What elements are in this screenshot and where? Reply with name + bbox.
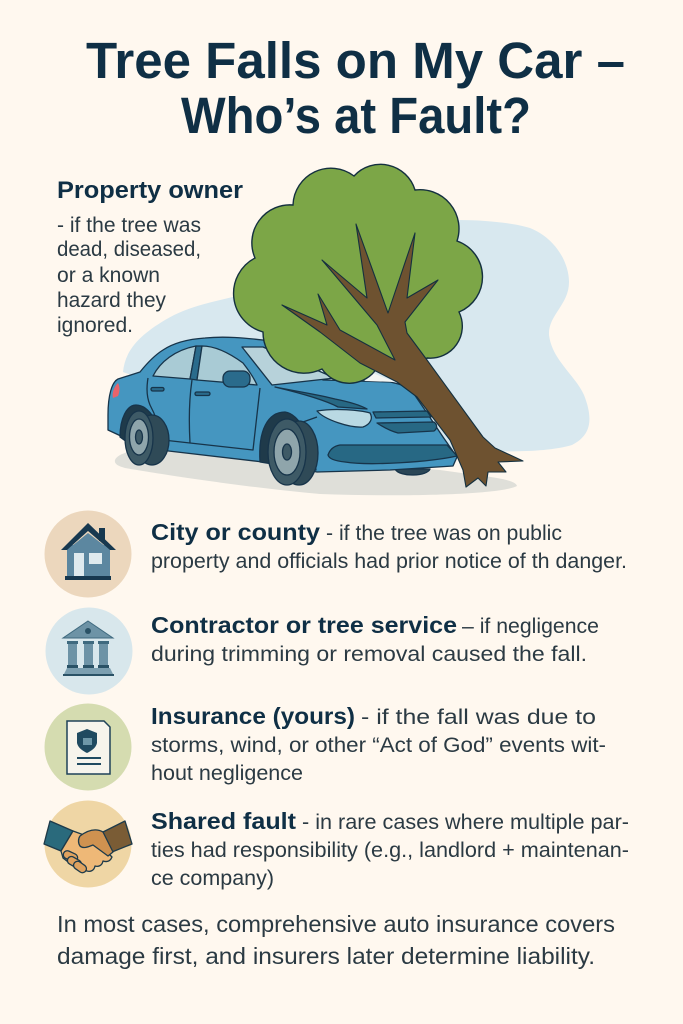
text block: insurance: - if the fall was due to — [361, 705, 596, 729]
lower intake — [328, 445, 457, 464]
illustration: tree fallen on car — [108, 164, 589, 495]
doors — [147, 378, 260, 450]
far tire — [395, 469, 430, 475]
footer note: damage first, and insurers later determine liability. — [57, 943, 595, 969]
text block: insurance: Insurance (yours) — [151, 703, 355, 729]
headlight — [317, 410, 371, 427]
text block: shared fault — [151, 808, 629, 890]
rear window — [153, 346, 196, 379]
text block: city or county: property and officials had prior notice of th danger. — [151, 549, 627, 573]
grille — [373, 411, 437, 433]
text block: contractor or tree service: Contractor or tree service — [151, 612, 457, 638]
text block: property owner: dead, diseased, — [57, 237, 201, 261]
text block: property owner: Property owner — [57, 177, 243, 204]
tree trunk and branches — [282, 224, 523, 487]
windshield — [242, 347, 335, 385]
text block: contractor or tree service: during trimming or removal caused the fall. — [151, 642, 587, 666]
window pillar — [190, 346, 202, 380]
text block: contractor or tree service: – if negligence — [462, 614, 599, 638]
text block: property owner: or a known — [57, 263, 160, 287]
text block: property owner: ignored. — [57, 313, 133, 337]
text block: contractor or tree service — [151, 612, 599, 666]
text block: city or county: City or county — [151, 519, 320, 545]
text block: insurance: storms, wind, or other “Act of God” events wit- — [151, 733, 606, 757]
text block: shared fault: - in rare cases where multiple par- — [302, 810, 629, 834]
door handles — [151, 388, 164, 391]
ground shadow — [115, 449, 517, 495]
mirror — [223, 371, 250, 387]
text block: city or county: - if the tree was on public — [326, 521, 562, 545]
text block: property owner — [57, 177, 243, 337]
title: Who’s at Fault? — [181, 87, 531, 144]
text block: property owner: - if the tree was — [57, 213, 201, 237]
hood crease — [275, 387, 367, 409]
text block: insurance — [151, 703, 606, 785]
background blob — [123, 220, 589, 451]
text block: shared fault: ce company) — [151, 866, 274, 890]
icon: insurance document — [44, 704, 132, 790]
title: Tree Falls on My Car – — [86, 32, 625, 89]
front wheel — [260, 412, 316, 470]
car — [108, 337, 457, 485]
title — [86, 32, 625, 144]
text block: city or county — [151, 519, 627, 573]
icon: government building — [46, 608, 132, 694]
footer note: In most cases, comprehensive auto insurance covers — [57, 911, 615, 937]
rear wheel — [120, 405, 166, 450]
text block: insurance: hout negligence — [151, 761, 303, 785]
tree crown — [234, 164, 482, 383]
footer note — [57, 911, 615, 969]
icon: handshake — [44, 800, 132, 888]
tail light — [113, 383, 120, 398]
car body — [108, 337, 457, 472]
icon: house — [44, 510, 132, 598]
text block: property owner: hazard they — [57, 288, 166, 312]
front side window — [197, 346, 257, 385]
text block: shared fault: ties had responsibility (e.g., landlord + maintenan- — [151, 838, 629, 862]
text block: shared fault: Shared fault — [151, 808, 296, 834]
